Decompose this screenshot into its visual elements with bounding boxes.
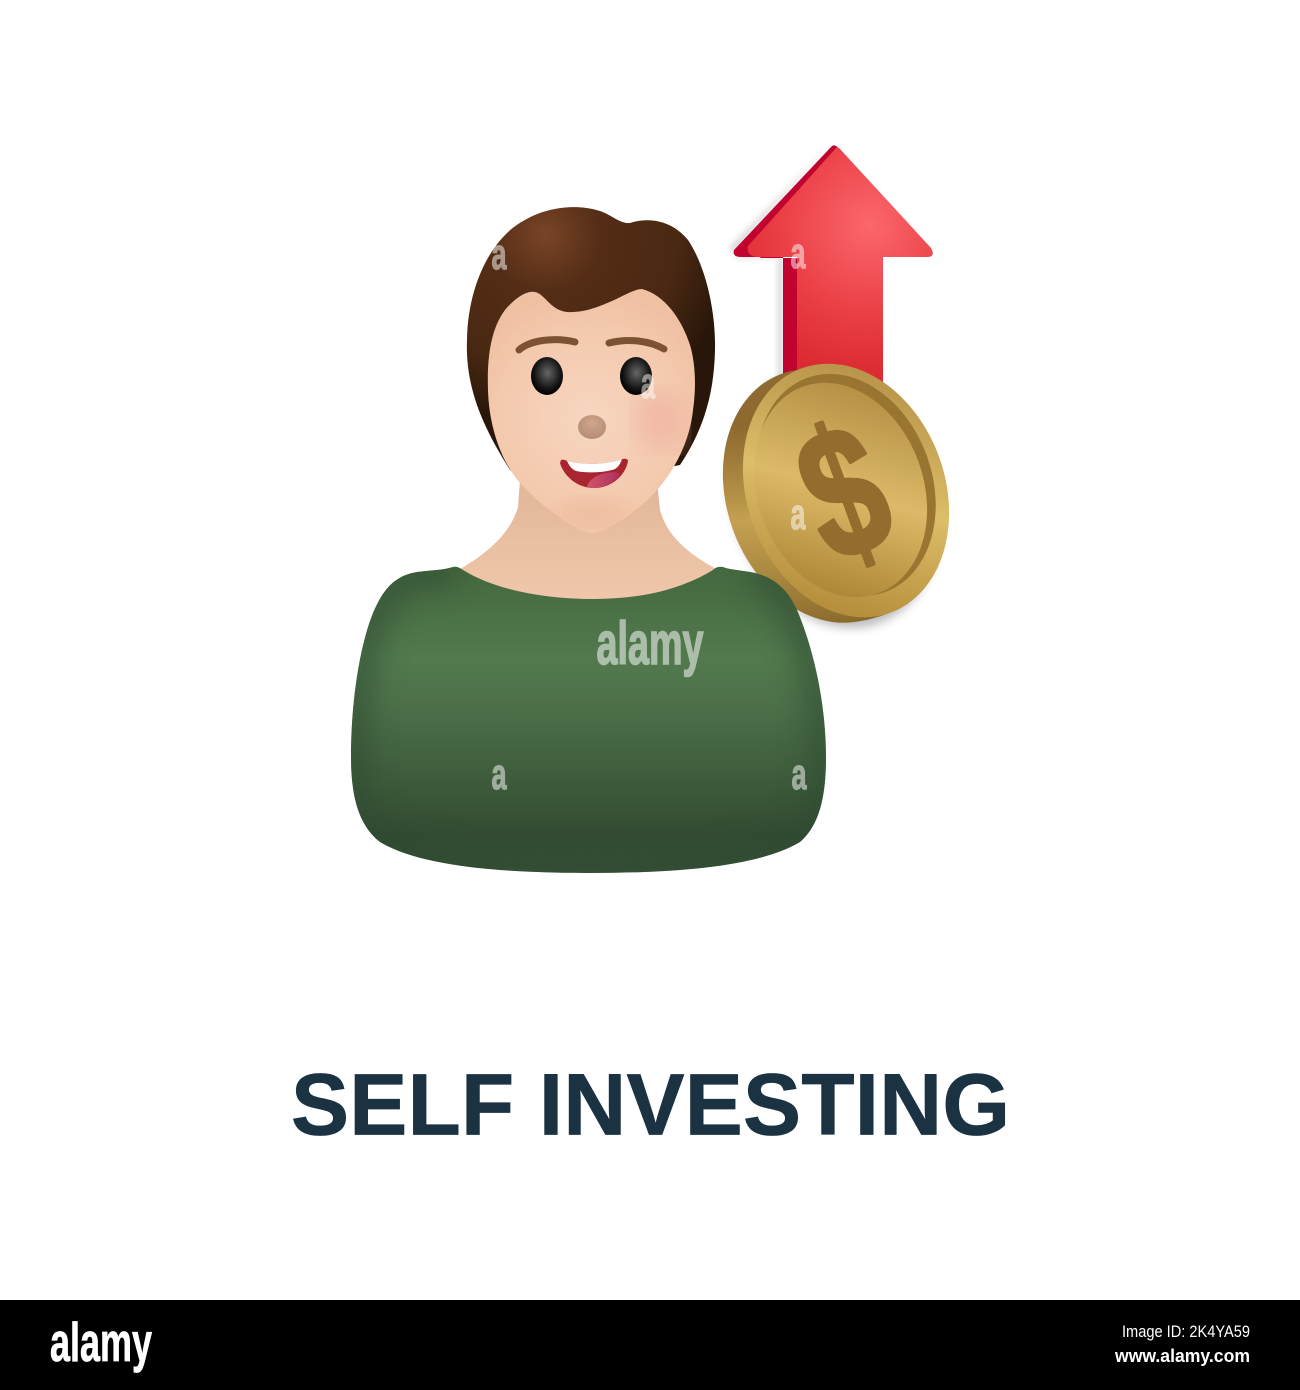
eyebrows (519, 340, 664, 350)
icon: dollar coin (689, 334, 983, 658)
hair (467, 207, 715, 480)
cheek blush (634, 390, 686, 450)
neck (455, 480, 722, 600)
image id: Image ID: 2K4YA59 (1122, 1322, 1250, 1341)
face (488, 289, 695, 534)
arrow side (734, 145, 838, 385)
footer logo: alamy: alamy (50, 1311, 152, 1373)
icon: person (340, 207, 840, 880)
watermark: small marks: a (790, 490, 806, 539)
watermark: alamy: alamy (596, 610, 704, 677)
watermark: small marks: a (641, 359, 655, 408)
eyes (531, 357, 652, 395)
coin rim (709, 334, 983, 647)
arrow shadow (729, 143, 832, 380)
watermark: small marks (492, 229, 807, 799)
icon: red arrow (729, 143, 933, 385)
sweater (340, 560, 840, 880)
watermark: small marks: a (492, 750, 507, 799)
watermark: small marks: a (492, 230, 507, 279)
footer bar (0, 1300, 1300, 1390)
coin face (725, 358, 956, 622)
watermark: small marks: a (790, 229, 806, 278)
watermark: small marks: a (792, 750, 807, 799)
website: www.alamy.com (1114, 1346, 1250, 1366)
coin back edge (689, 337, 976, 652)
nose (578, 415, 606, 439)
chin shading (556, 498, 628, 526)
dollar sign: $ (773, 383, 915, 602)
coin groove (726, 348, 966, 622)
title: SELF INVESTING (291, 1056, 1010, 1154)
mouth (560, 459, 628, 488)
coin shadow (694, 342, 974, 658)
arrow front (748, 147, 933, 385)
